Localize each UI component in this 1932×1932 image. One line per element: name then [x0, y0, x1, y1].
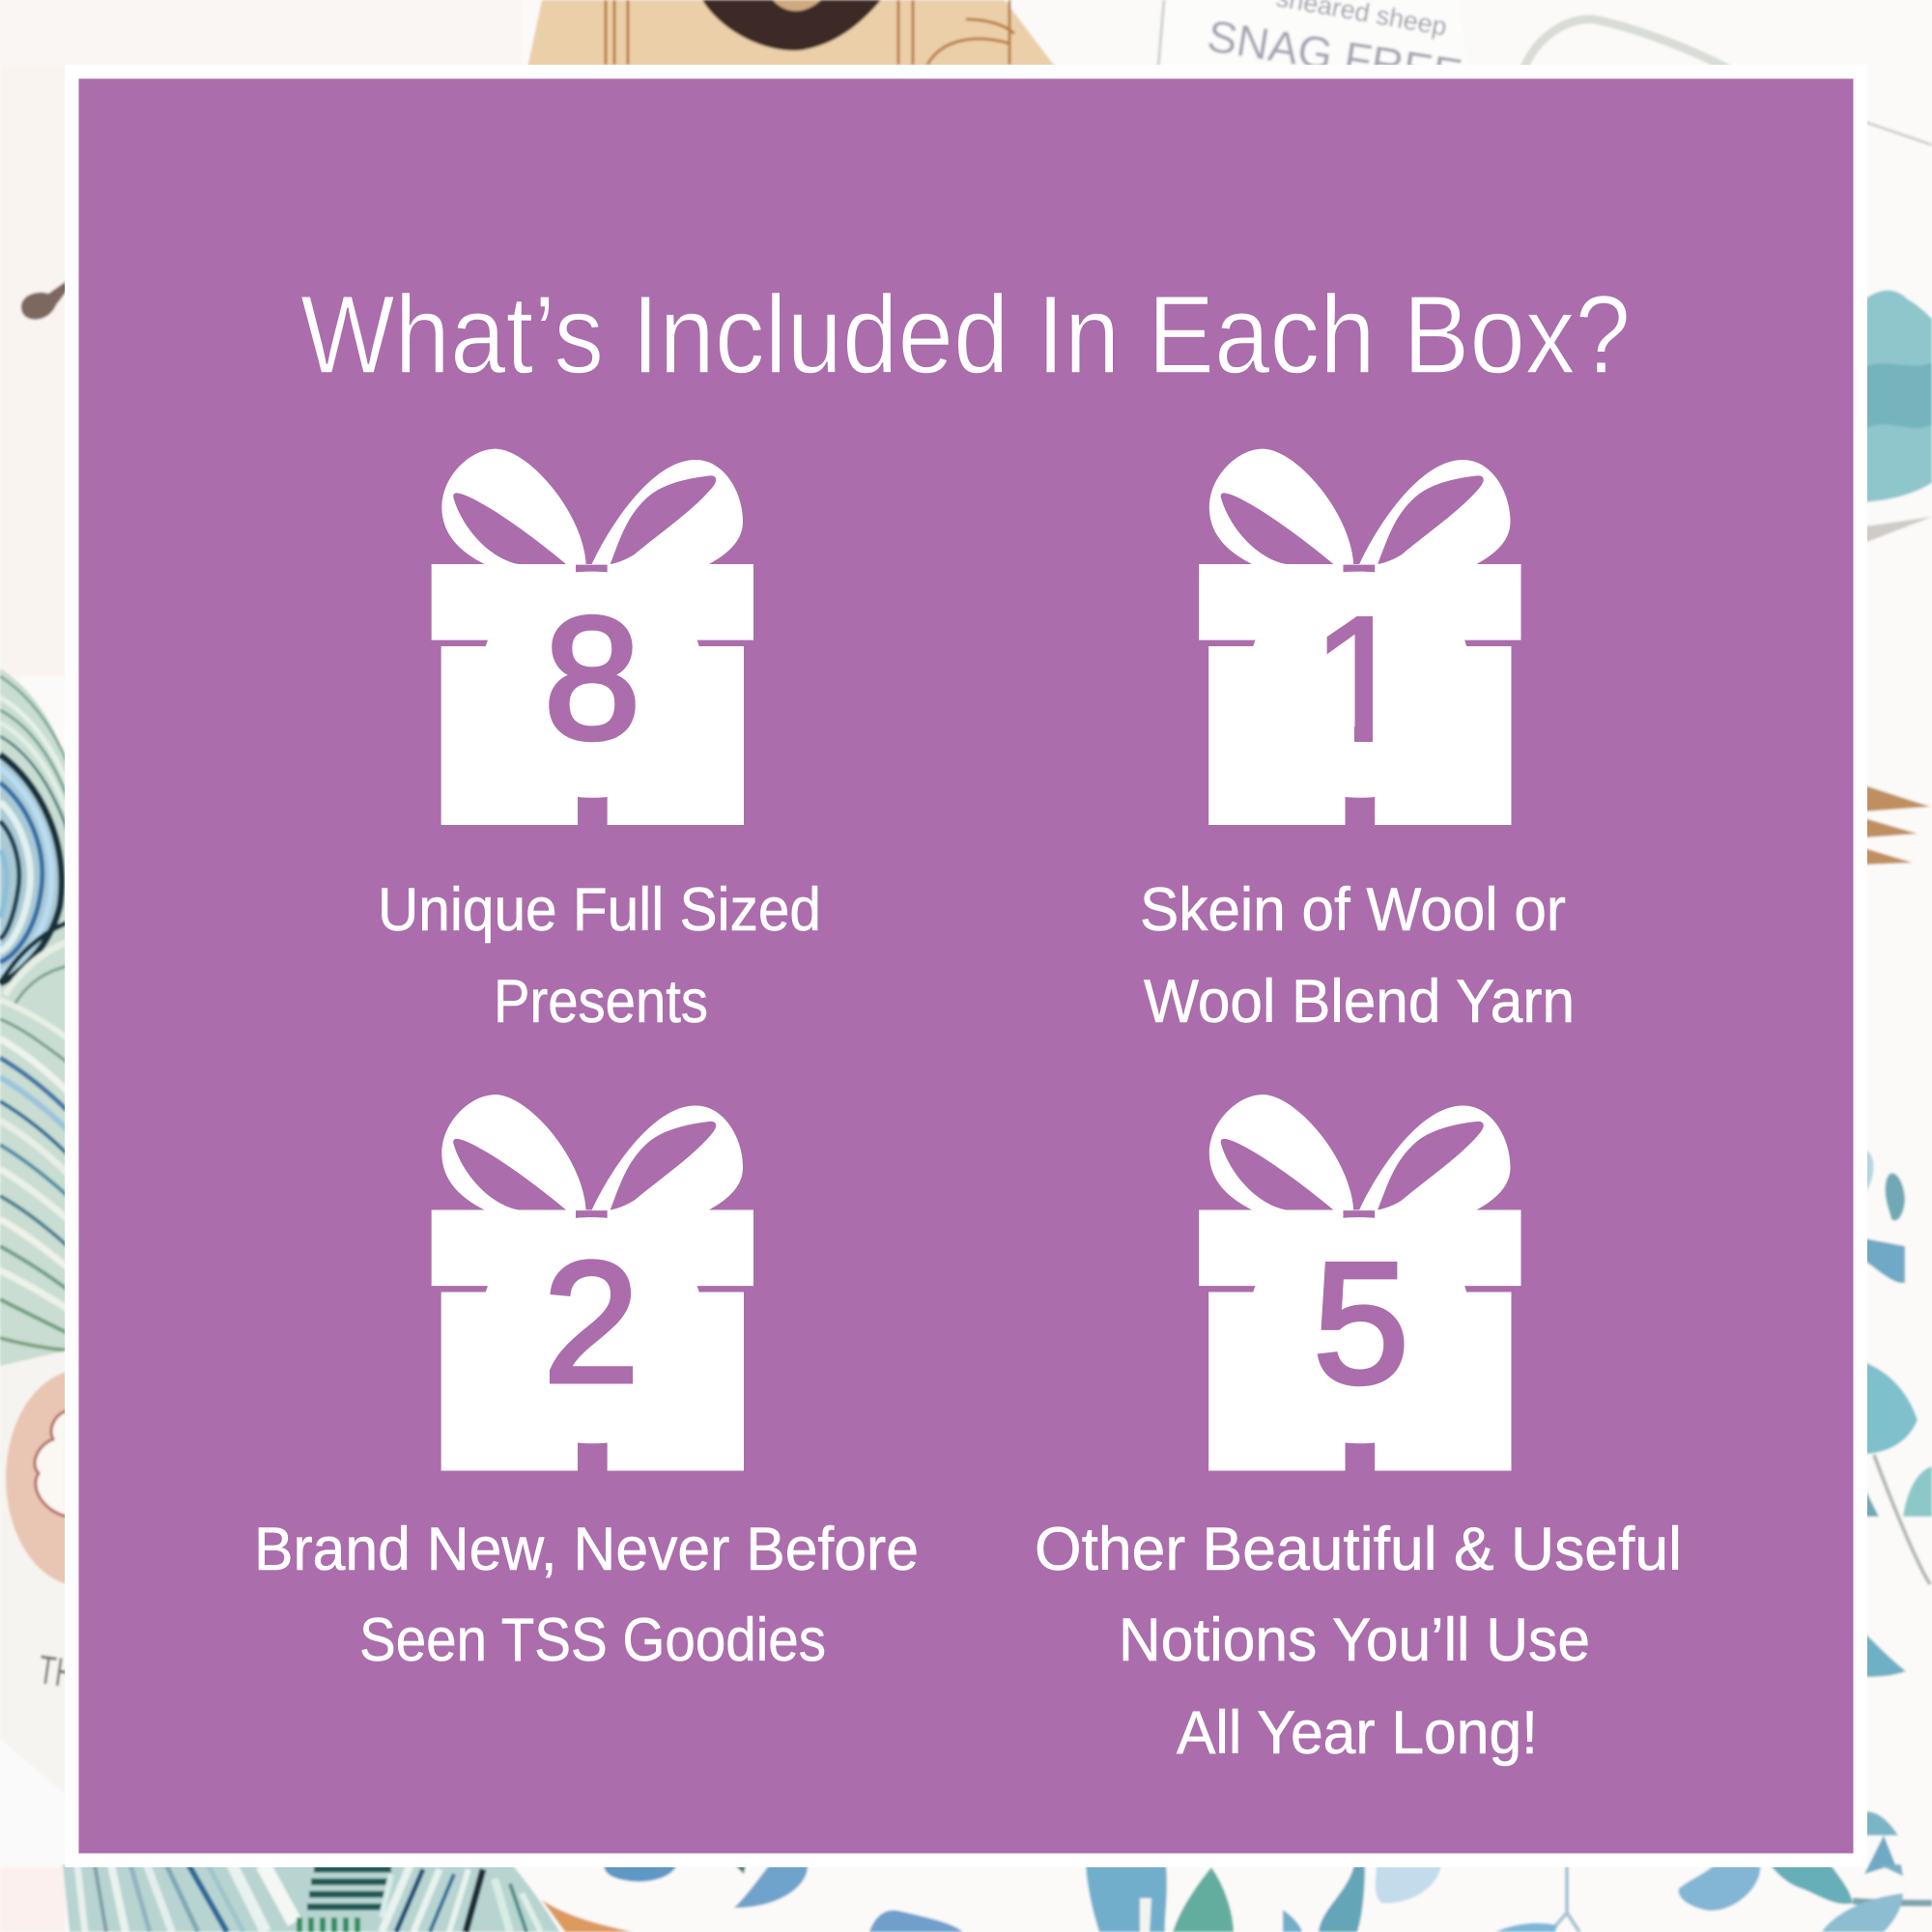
panel: 5 notions	[1035, 1094, 1682, 1767]
watercolor leaves at bottom	[604, 1864, 1932, 1932]
caption: Wool Blend Yarn	[1144, 968, 1575, 1036]
wooden needles on right	[1864, 785, 1930, 865]
label with peach circle: THE	[36, 1646, 98, 1699]
caption	[254, 1516, 919, 1674]
caption: Brand New, Never Before	[254, 1516, 919, 1583]
round dish at top right	[1524, 19, 1729, 70]
number 1: 1	[1311, 580, 1410, 780]
label with peach circle	[0, 1350, 156, 1867]
icon: gift box	[1199, 449, 1520, 825]
paper tag with text	[1158, 0, 1468, 109]
wooden needle at bottom	[542, 1900, 633, 1932]
yarn skein on left	[0, 668, 68, 1366]
wooden tool	[527, 0, 1056, 68]
caption	[1035, 1516, 1682, 1767]
icon: gift box	[432, 1094, 753, 1470]
caption	[1140, 876, 1575, 1036]
caption: Unique Full Sized	[378, 876, 821, 944]
caption: Skein of Wool or	[1140, 876, 1566, 944]
caption: All Year Long!	[1177, 1699, 1538, 1767]
caption: Other Beautiful & Useful	[1035, 1516, 1682, 1583]
watercolor leaves on right	[1864, 1150, 1932, 1874]
caption	[378, 876, 821, 1036]
inner blue twist	[0, 754, 60, 983]
teal bowl on right	[1864, 122, 1932, 543]
panel: 8 presents	[378, 449, 821, 1036]
title: What’s Included In Each Box?	[300, 273, 1631, 397]
paper tag with text: ROW	[1200, 60, 1285, 109]
number 5: 5	[1314, 1227, 1408, 1419]
number 2: 2	[543, 1226, 639, 1418]
caption: Notions You’ll Use	[1119, 1606, 1590, 1674]
icon: gift box	[1199, 1094, 1520, 1470]
caption: Presents	[494, 968, 708, 1036]
panel: 2 goodies	[254, 1094, 919, 1674]
panel: 1 skein	[1140, 449, 1575, 1036]
brown spoon on left	[21, 280, 68, 320]
paper tag with text: SNAG FREE	[1204, 11, 1465, 99]
yarn skein at bottom	[63, 1864, 560, 1932]
number 8: 8	[544, 582, 640, 776]
caption: Seen TSS Goodies	[359, 1606, 826, 1674]
icon: gift box	[432, 449, 753, 825]
